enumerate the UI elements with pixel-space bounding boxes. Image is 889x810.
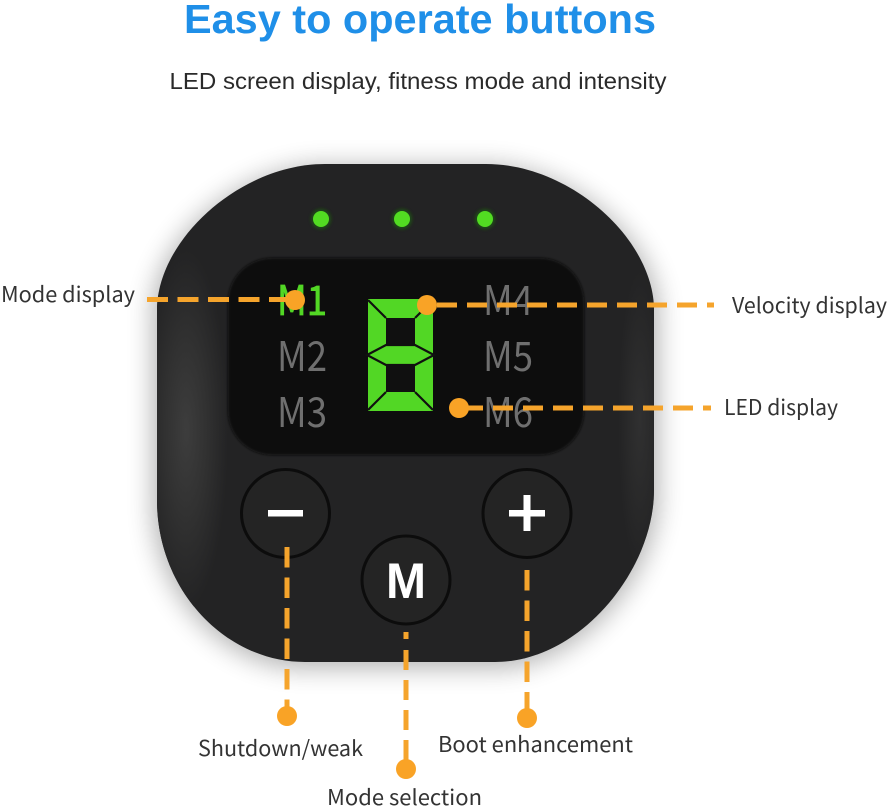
callout: boot enhancement: Boot enhancement <box>438 728 633 759</box>
mode labels: M5 <box>483 323 533 383</box>
seven-segment digit <box>367 299 434 411</box>
mode labels: M3 <box>277 379 327 439</box>
callout: velocity display: Velocity display <box>732 289 887 320</box>
LED screen <box>228 258 584 455</box>
M button: M <box>386 553 426 609</box>
callout: velocity display <box>417 289 887 320</box>
callout: shutdown/weak <box>198 547 363 763</box>
subtitle: LED screen display, fitness mode and intensity <box>170 68 667 94</box>
callout: LED display: LED display <box>724 391 838 422</box>
callout: LED display <box>449 391 838 422</box>
mode labels <box>277 267 533 439</box>
minus button <box>242 470 330 558</box>
mode labels: M2 <box>277 323 327 383</box>
callout: shutdown/weak: Shutdown/weak <box>198 732 363 763</box>
callout: mode selection <box>327 632 482 810</box>
M button <box>362 536 450 624</box>
callout: mode display: Mode display <box>1 278 135 309</box>
mode labels: M1 <box>277 267 327 327</box>
callout: mode display <box>1 278 305 310</box>
mode labels: M4 <box>483 267 533 327</box>
mode labels: M6 <box>483 379 533 439</box>
indicator lights <box>311 209 495 229</box>
plus button <box>483 470 571 558</box>
callout: boot enhancement <box>438 570 633 759</box>
device <box>144 164 662 668</box>
